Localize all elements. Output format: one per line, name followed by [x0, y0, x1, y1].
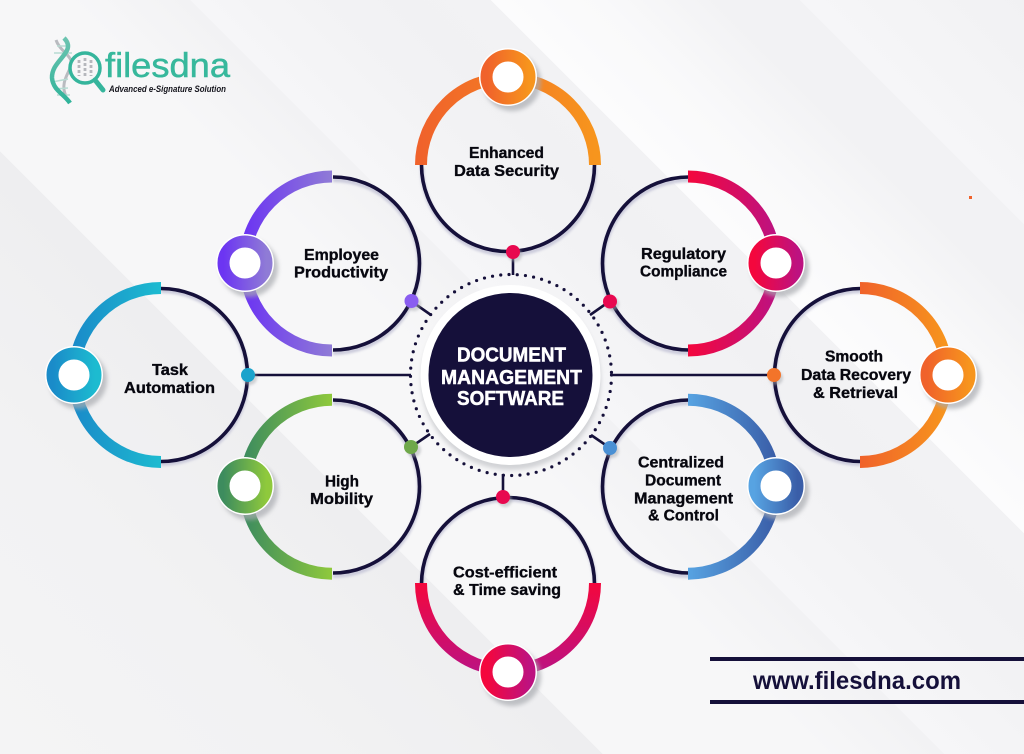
panel: Centralized Document Management & Control: Centralized: [638, 454, 724, 472]
panel: Task Automation: Task: [152, 362, 188, 379]
panel: Regulatory Compliance: Compliance: [640, 264, 727, 280]
panel: Regulatory Compliance: Regulatory: [641, 246, 726, 263]
panel: Enhanced Data Security: Data Security: [454, 163, 559, 180]
logo tagline: Advanced e-Signature Solution: [108, 84, 226, 95]
panel: Task Automation: [45, 288, 257, 464]
panel: Regulatory Compliance: [602, 176, 809, 353]
panel: Centralized Document Management & Control: & Control: [648, 508, 719, 524]
panel: Smooth Data Recovery & Retrieval: & Retrieval: [813, 385, 898, 402]
panel: High Mobility: [216, 400, 421, 576]
logo: [52, 38, 230, 103]
panel: Task Automation: Automation: [124, 380, 215, 397]
panel: Smooth Data Recovery & Retrieval: Smooth: [825, 348, 883, 366]
central hub: SOFTWARE: [457, 388, 564, 410]
panel: Centralized Document Management & Control: [602, 400, 809, 576]
panel: Cost-efficient & Time saving: [421, 490, 595, 706]
panel: Cost-efficient & Time saving: & Time saving: [453, 582, 561, 599]
panel: Employee Productivity: [216, 176, 421, 353]
panel: Smooth Data Recovery & Retrieval: [767, 288, 981, 464]
website footer: www.filesdna.com: [752, 667, 961, 695]
central hub: MANAGEMENT: [441, 367, 582, 389]
panel: Enhanced Data Security: [421, 48, 595, 262]
central hub: [410, 274, 612, 476]
panel: Smooth Data Recovery & Retrieval: Data Recovery: [801, 367, 911, 384]
speck: [969, 196, 972, 199]
panel: Enhanced Data Security: Enhanced: [469, 145, 544, 162]
logo wordmark: filesdna: [105, 47, 230, 85]
connector lines: [248, 252, 774, 497]
central hub: DOCUMENT: [457, 344, 566, 366]
panel: High Mobility: Mobility: [310, 491, 373, 508]
panel: Employee Productivity: Productivity: [294, 264, 388, 282]
panel: Employee Productivity: Employee: [304, 247, 379, 264]
panel: Cost-efficient & Time saving: Cost-efficient: [453, 564, 558, 582]
panel: Centralized Document Management & Control: Document: [645, 472, 722, 490]
icon: DNA helix with magnifier: [52, 38, 103, 103]
panel: Centralized Document Management & Control: Management: [634, 490, 734, 508]
panel: High Mobility: High: [325, 474, 359, 490]
website footer: [710, 657, 1024, 704]
